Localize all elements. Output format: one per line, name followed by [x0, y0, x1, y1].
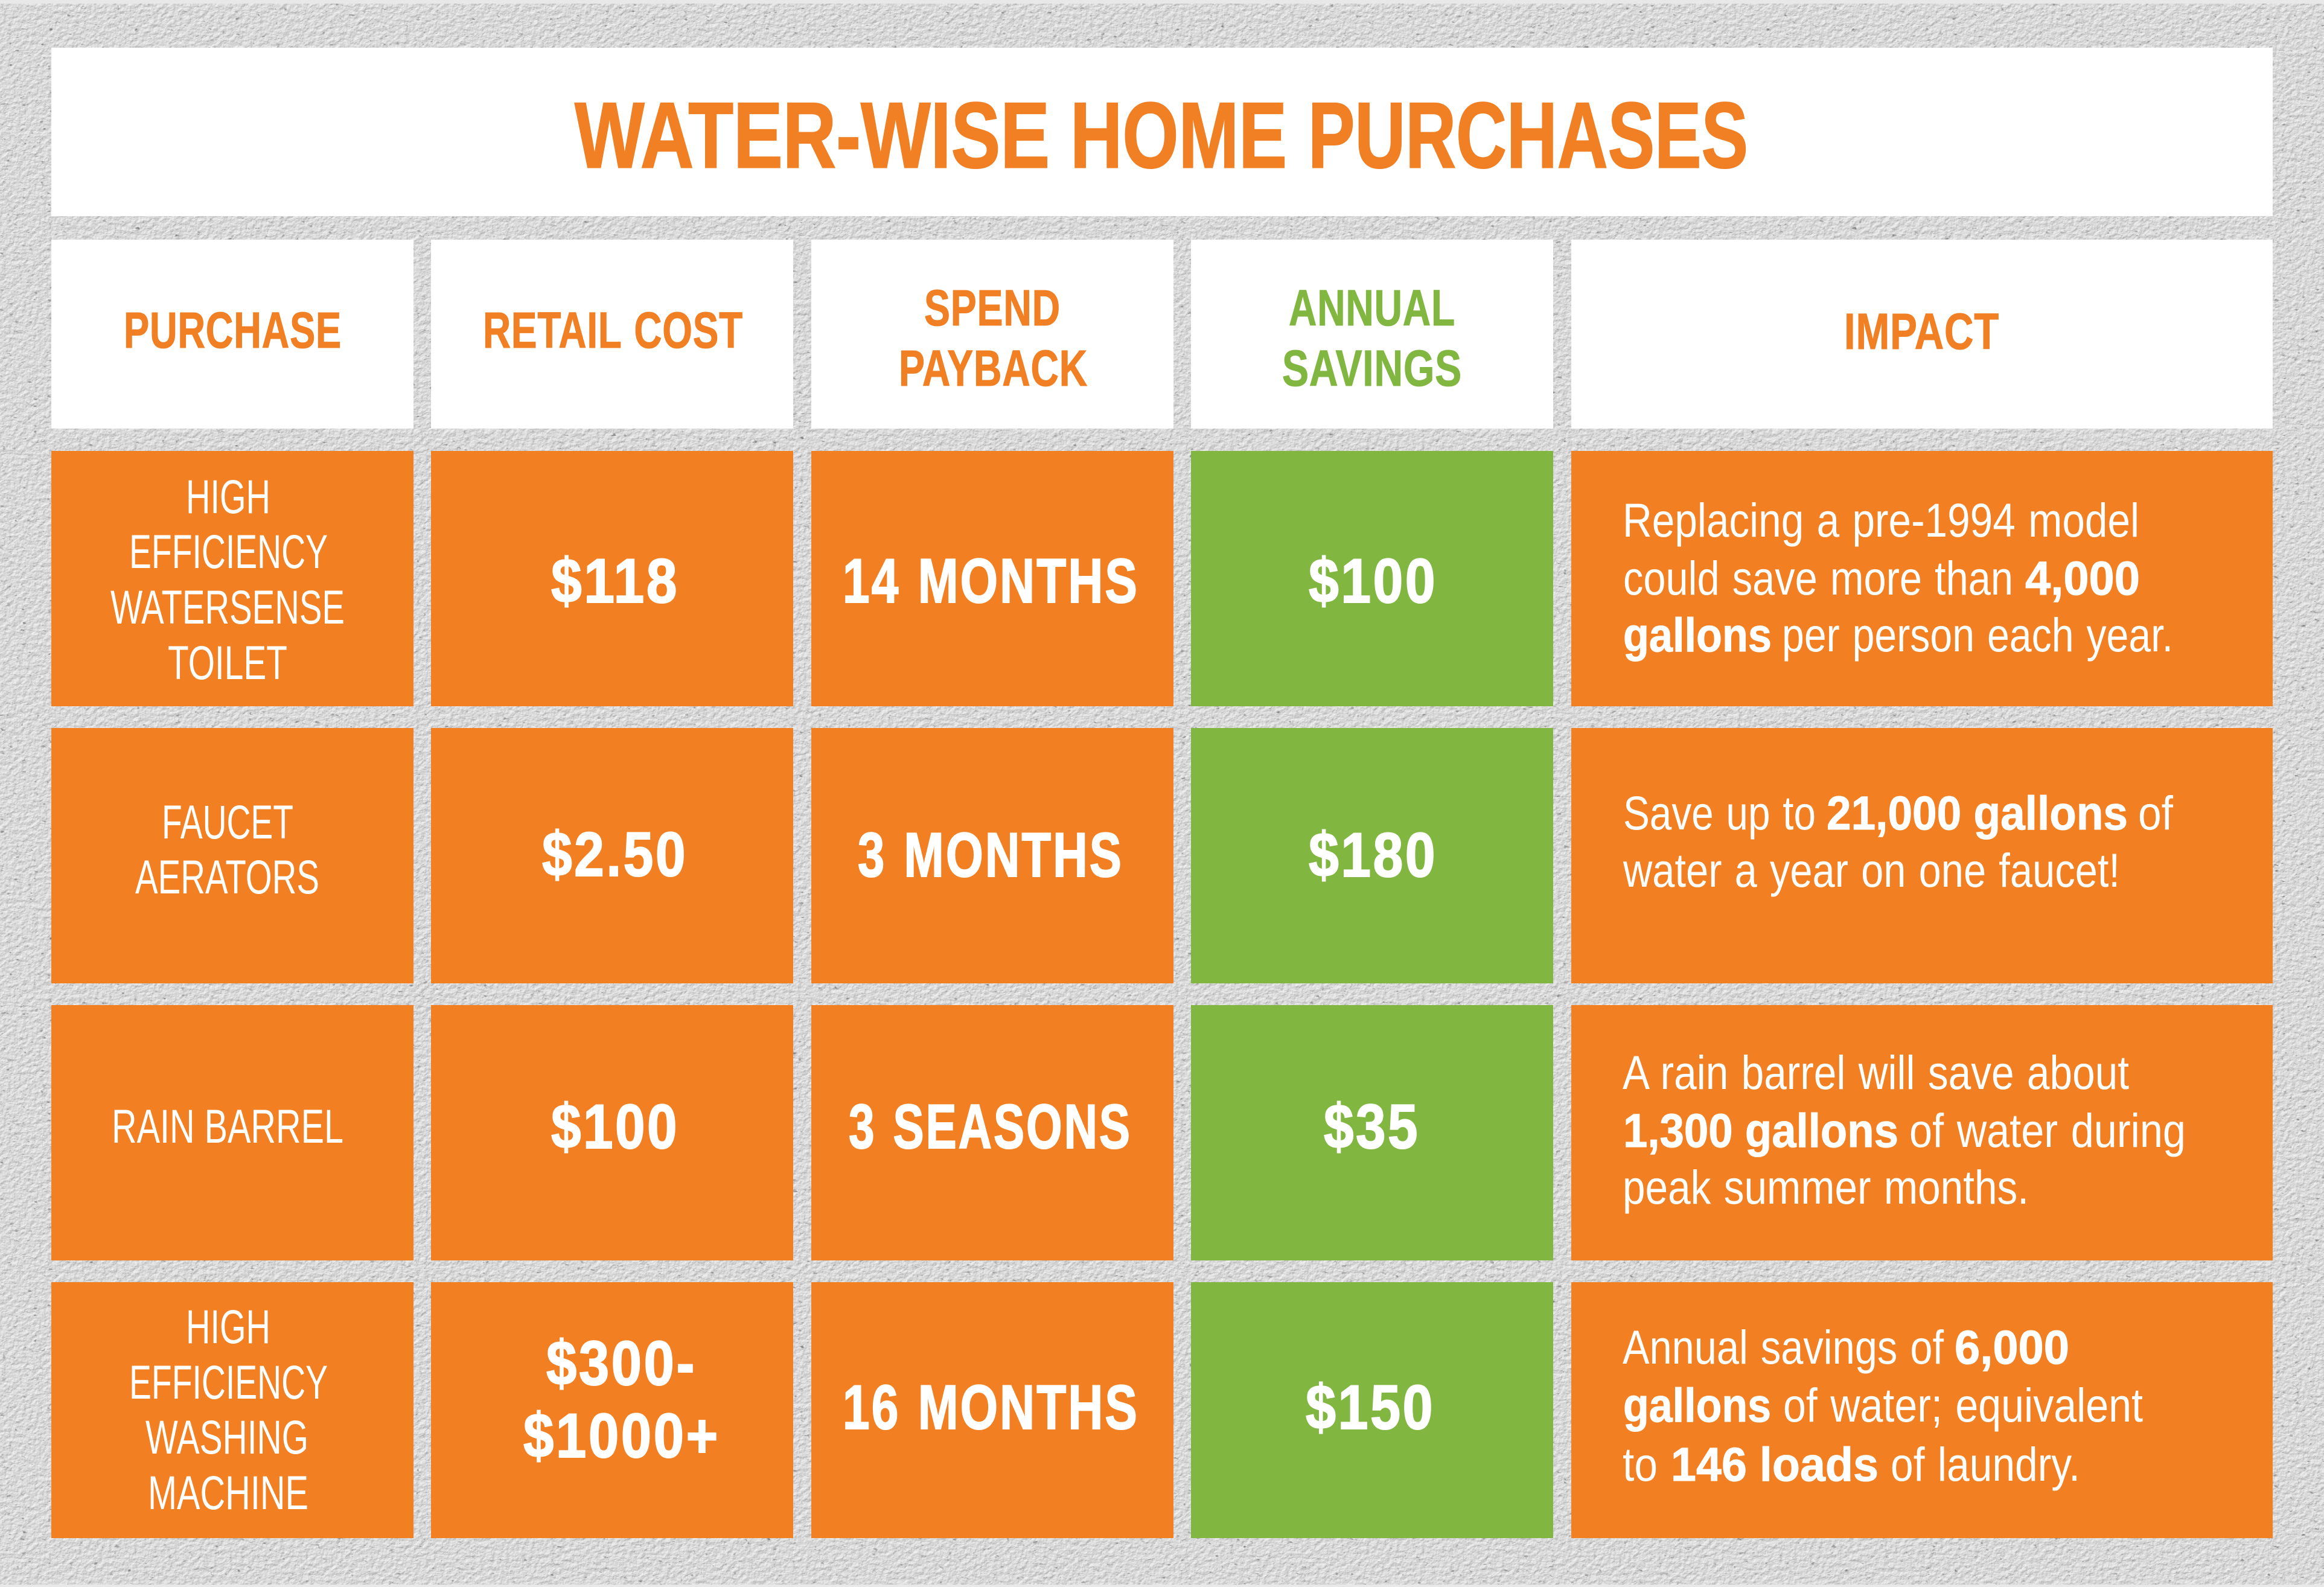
row 3 purchase: rain barrel: RAIN BARREL: [112, 1099, 343, 1153]
row 3 impact text: of water during: [1909, 1103, 2186, 1157]
row 4 impact text: gallons: [1623, 1378, 1771, 1432]
row 2 impact text: water a year on one faucet!: [1623, 843, 2120, 897]
row 4 purchase: washing machine: WASHING: [145, 1410, 308, 1464]
row 4 impact text: Annual savings of: [1623, 1320, 1944, 1374]
column header: annual savings: ANNUAL: [1289, 279, 1455, 336]
row 1 impact text: 4,000: [2025, 551, 2140, 605]
row 4 purchase: washing machine: [51, 1282, 413, 1538]
row 3 annual savings: [1191, 1005, 1553, 1260]
row 1 impact text: [1571, 451, 2273, 706]
row 2 retail cost: $2.50: [542, 820, 688, 890]
row 1 purchase: toilet: EFFICIENCY: [129, 525, 328, 578]
row 1 retail cost: [431, 451, 793, 706]
row 2 purchase: aerators: FAUCET: [162, 795, 293, 849]
row 4 impact text: of water; equivalent: [1783, 1378, 2143, 1432]
column header: impact: IMPACT: [1844, 303, 1999, 360]
column header: annual savings: SAVINGS: [1282, 340, 1462, 397]
row 2 impact text: Save up to: [1623, 786, 1816, 840]
row 1 purchase: toilet: WATERSENSE: [110, 580, 345, 634]
row 4 retail cost: $300-: [546, 1329, 697, 1399]
row 4 purchase: washing machine: HIGH: [186, 1300, 270, 1353]
row 2 annual savings: [1191, 728, 1553, 983]
row 4 impact text: 146 loads: [1671, 1437, 1879, 1491]
row 4 retail cost: $1000+: [523, 1401, 720, 1471]
row 4 annual savings: [1191, 1282, 1553, 1538]
column header: retail cost: RETAIL COST: [483, 302, 743, 359]
row 4 retail cost: [431, 1282, 793, 1538]
column header: annual savings: [1191, 240, 1553, 429]
row 4 annual savings: $150: [1306, 1373, 1435, 1443]
row 4 impact text: to: [1623, 1437, 1658, 1491]
row 1 purchase: toilet: HIGH: [186, 470, 270, 523]
title: WATER-WISE: [575, 83, 1050, 187]
column header: retail cost: [431, 240, 793, 429]
row 1 impact text: per person each year.: [1782, 608, 2173, 662]
row 1 payback: [811, 451, 1173, 706]
column header: spend payback: SPEND: [924, 279, 1061, 336]
row 4 impact text: 6,000: [1955, 1320, 2069, 1374]
column header: purchase: PURCHASE: [124, 302, 342, 359]
row 1 impact text: gallons: [1623, 608, 1772, 662]
row 2 purchase: aerators: [51, 728, 413, 983]
row 3 annual savings: $35: [1324, 1092, 1420, 1162]
row 2 impact text: [1571, 728, 2273, 983]
row 2 impact text: 21,000 gallons: [1827, 786, 2128, 840]
row 2 purchase: aerators: AERATORS: [135, 850, 319, 904]
title: [575, 83, 1748, 187]
row 3 impact text: [1571, 1005, 2273, 1260]
row 3 impact text: A rain barrel will save about: [1623, 1046, 2129, 1099]
row 1 retail cost: $118: [551, 546, 679, 616]
column header: spend payback: [811, 240, 1173, 429]
row 2 annual savings: $180: [1309, 820, 1437, 890]
row 3 payback: 3 SEASONS: [849, 1092, 1132, 1162]
row 2 retail cost: [431, 728, 793, 983]
row 1 annual savings: [1191, 451, 1553, 706]
row 4 impact text: [1571, 1282, 2273, 1538]
row 3 retail cost: $100: [551, 1092, 679, 1162]
row 3 impact text: peak summer months.: [1623, 1160, 2029, 1214]
title: HOME: [1070, 83, 1287, 187]
row 1 purchase: toilet: [51, 451, 413, 706]
row 2 payback: [811, 728, 1173, 983]
row 1 impact text: could save more than: [1623, 551, 2013, 605]
row 4 purchase: washing machine: MACHINE: [148, 1466, 308, 1519]
row 3 retail cost: [431, 1005, 793, 1260]
row 4 payback: 16 MONTHS: [843, 1373, 1139, 1443]
row 2 impact text: of: [2138, 786, 2174, 840]
row 1 purchase: toilet: TOILET: [168, 636, 287, 689]
row 1 impact text: Replacing a pre-1994 model: [1623, 493, 2139, 547]
title: PURCHASES: [1308, 83, 1748, 187]
row 4 purchase: washing machine: EFFICIENCY: [129, 1355, 328, 1409]
row 1 payback: 14 MONTHS: [843, 546, 1139, 616]
row 1 annual savings: $100: [1309, 546, 1437, 616]
row 3 purchase: rain barrel: [51, 1005, 413, 1260]
row 3 impact text: 1,300 gallons: [1623, 1103, 1898, 1157]
column header: spend payback: PAYBACK: [899, 340, 1088, 397]
row 4 payback: [811, 1282, 1173, 1538]
column header: purchase: [51, 240, 413, 429]
row 4 impact text: of laundry.: [1891, 1437, 2080, 1491]
row 3 payback: [811, 1005, 1173, 1260]
row 2 payback: 3 MONTHS: [858, 820, 1123, 890]
title panel: [51, 48, 2273, 216]
column header: impact: [1571, 240, 2273, 429]
